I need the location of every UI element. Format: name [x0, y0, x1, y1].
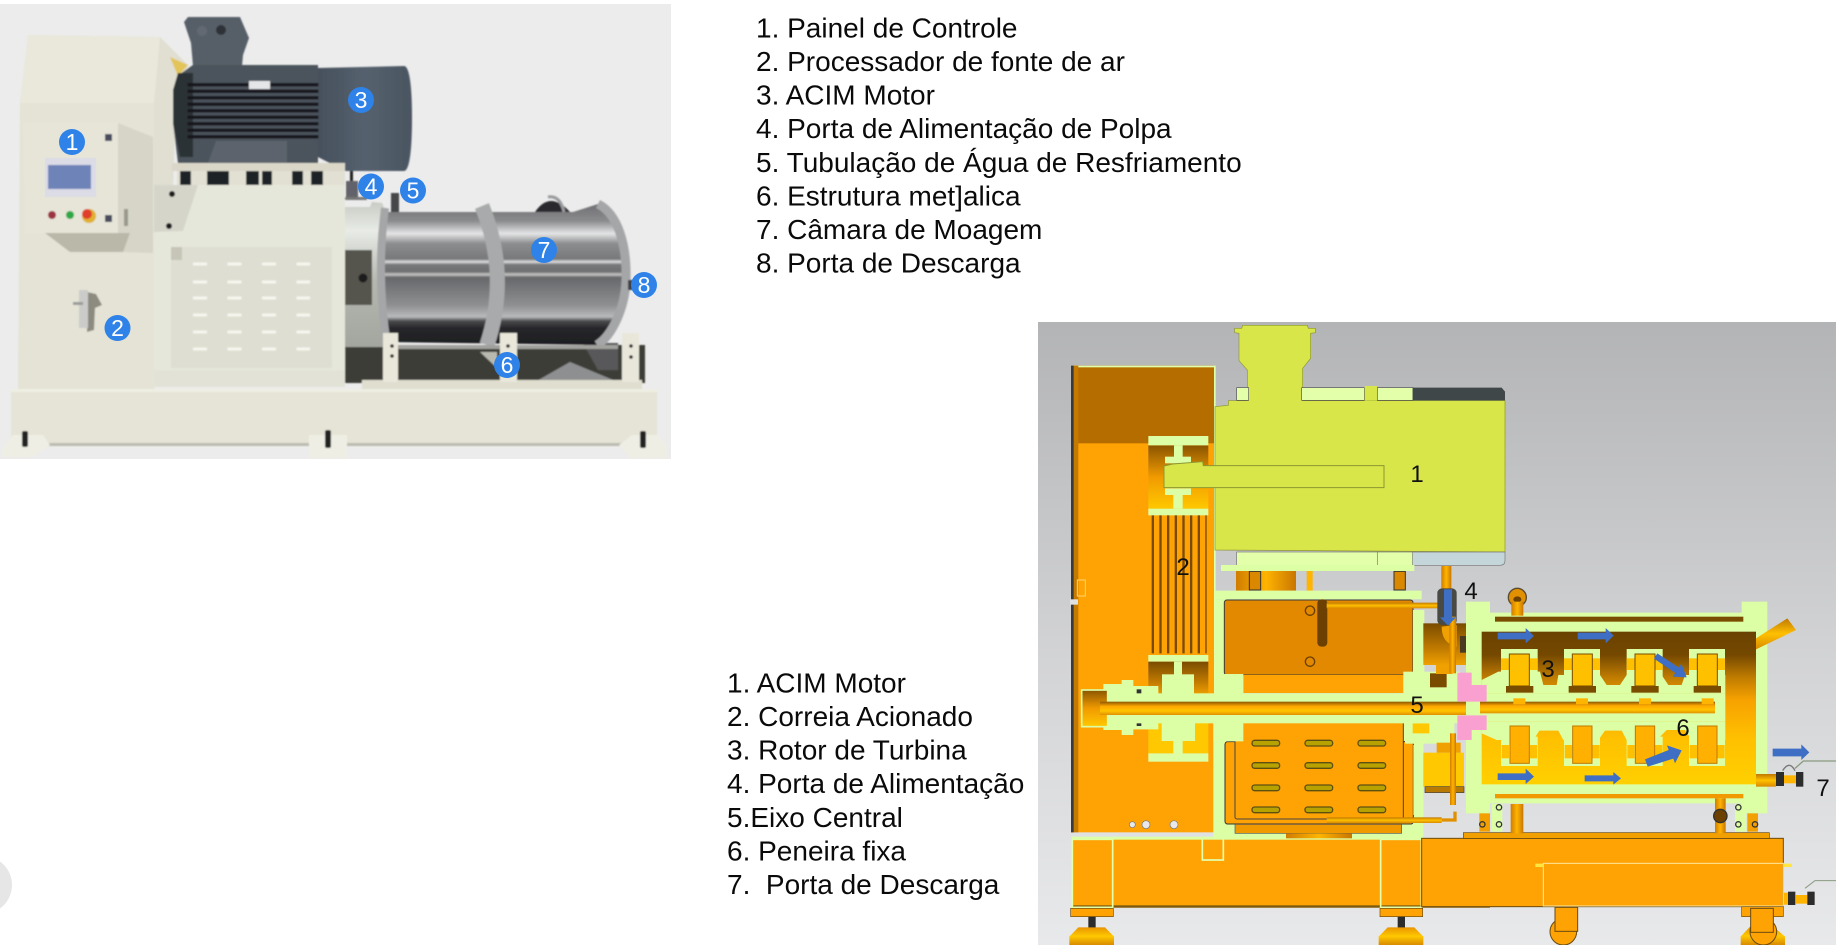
arrow: discharge flow — [1773, 744, 1809, 760]
diagram number 2: 2 — [1176, 554, 1190, 581]
motor body — [1215, 325, 1505, 552]
left half: cabinet, motor, pulleys — [1070, 325, 1505, 832]
upper rotors — [1501, 649, 1725, 693]
motor casing strips — [1221, 386, 1505, 571]
discharge vent pipe — [1756, 618, 1796, 649]
machine illustration — [2, 17, 667, 458]
diagram number 7: 7 — [1816, 775, 1830, 802]
legend: machine parts list: 8. Porta de Descarga — [756, 248, 1021, 279]
buttons — [48, 211, 56, 219]
base top ledge — [362, 380, 642, 389]
shaft core inside chamber — [1480, 702, 1715, 713]
legend: cross-section parts list: 2. Correia Acionado — [727, 701, 973, 732]
base frame — [11, 389, 657, 446]
control box — [23, 123, 153, 253]
cooling channels — [1495, 617, 1743, 622]
base frame right part — [1422, 833, 1792, 907]
support stands and bar — [383, 333, 639, 382]
shaft cap — [1082, 690, 1108, 727]
arrow: flow top 2 — [1578, 628, 1614, 643]
pink seal upper — [1457, 673, 1487, 702]
diagram number 3: 3 — [1541, 656, 1555, 683]
callout 8: 8 — [638, 272, 650, 298]
cabinet wall and panels — [1070, 366, 1216, 832]
callout 5: 5 — [407, 178, 419, 204]
callout 1: 1 — [66, 129, 78, 155]
chamber frame — [1466, 602, 1767, 813]
vent slots — [1252, 740, 1386, 813]
feet — [2, 430, 667, 458]
shaft continuation band — [1480, 693, 1725, 721]
middle frame and tank — [1215, 591, 1460, 699]
central shaft band — [1100, 693, 1490, 723]
shaft clips — [1513, 698, 1714, 704]
motor drive pulley — [1148, 436, 1208, 509]
callout 5 — [400, 178, 426, 204]
callout 6: 6 — [501, 352, 513, 378]
base frame — [1072, 837, 1490, 908]
feed inlet chamber — [1423, 566, 1473, 673]
right half: grinding chamber — [1422, 566, 1836, 945]
callout 2: 2 — [111, 315, 124, 341]
callout 4: 4 — [365, 174, 378, 200]
legend: cross-section parts list: 1. ACIM Motor — [727, 668, 906, 698]
motor frame — [173, 65, 318, 163]
diagram number 5: 5 — [1410, 692, 1424, 719]
legend: machine parts list: 2. Processador de fonte de ar — [756, 46, 1125, 77]
callout 1 — [59, 129, 85, 155]
diagram number 4: 4 — [1464, 578, 1478, 605]
cross-section diagram — [1038, 322, 1836, 945]
central shaft core — [1100, 702, 1490, 715]
legend: cross-section parts list: 4. Porta de Alimentação — [727, 768, 1024, 799]
callout 2 — [104, 315, 130, 341]
legend: cross-section parts list: 7. Porta de Descarga — [727, 869, 1000, 900]
callout 6 — [494, 352, 520, 378]
driven pulley — [1148, 662, 1208, 695]
cabinet holes — [1129, 821, 1178, 829]
photo: bead mill machine with numbered callouts — [0, 4, 671, 459]
base feet — [1069, 908, 1423, 945]
legend: machine parts list: 5. Tubulação de Água de Resfriamento — [756, 147, 1242, 178]
upper rotor band — [1482, 672, 1725, 693]
grinding chamber mount — [345, 202, 392, 347]
callout 3 — [348, 87, 374, 113]
motor with terminal box and fan cover — [172, 17, 412, 185]
diagram number 1: 1 — [1410, 461, 1424, 488]
lower left: base, lower tank, shaft — [1069, 680, 1490, 945]
legend: machine parts list: 6. Estrutura met]alica — [756, 180, 1021, 211]
drive belts — [1148, 509, 1208, 662]
lower rotor band — [1482, 721, 1725, 740]
fan cover — [318, 66, 412, 171]
arrow: flow diagonal upper — [1654, 653, 1687, 677]
legend: machine parts list: 3. ACIM Motor — [756, 80, 935, 111]
discharge port valve — [1756, 761, 1836, 787]
lower tank frame — [1213, 722, 1423, 838]
decorative grey circle at page edge — [0, 856, 12, 914]
callout 3: 3 — [355, 87, 367, 113]
legend: cross-section parts list: 6. Peneira fixa — [727, 835, 906, 866]
legend: cross-section parts list: 3. Rotor de Turbina — [727, 735, 967, 766]
chamber stands and drains — [1479, 798, 1758, 833]
callout 8 — [631, 272, 657, 298]
legend: machine parts list: 4. Porta de Alimentação de Polpa — [756, 113, 1172, 144]
casters — [1550, 907, 1785, 945]
legend: machine parts list: 1. Painel de Controle — [756, 12, 1018, 44]
lower discharge valve — [1784, 881, 1836, 905]
diagram background — [1038, 322, 1836, 945]
photo background — [0, 4, 671, 459]
callout 7: 7 — [538, 237, 550, 263]
motor shaft — [1164, 462, 1384, 488]
lower pipework — [1327, 733, 1456, 823]
pink seal lower — [1457, 715, 1487, 740]
feed port fitting — [345, 171, 367, 200]
middle cabinet — [154, 185, 345, 387]
arrow: feed flow down — [1440, 589, 1456, 626]
arrow: flow bottom 1 — [1498, 769, 1534, 784]
arrow: flow bottom 2 — [1585, 772, 1621, 785]
diagram number 6: 6 — [1676, 715, 1690, 742]
floor under chamber — [345, 345, 645, 383]
arrow: flow top 1 — [1498, 628, 1534, 643]
callout 4 — [358, 174, 384, 200]
bearing housings — [1103, 680, 1454, 744]
feed side housing — [1423, 743, 1464, 793]
arrow: flow diagonal lower — [1645, 745, 1682, 767]
motor mounting plate — [172, 163, 345, 171]
callout 7 — [531, 237, 557, 263]
air source processor — [73, 290, 102, 332]
touch screen — [45, 158, 96, 197]
motor lower components — [1236, 570, 1405, 591]
chamber interior — [1482, 632, 1756, 784]
terminal box — [184, 17, 249, 66]
legend: cross-section parts list: 5.Eixo Central — [727, 802, 903, 833]
cabinet rear panel — [18, 35, 188, 389]
legend: cross-section parts list — [727, 668, 1024, 900]
lower rotors — [1501, 726, 1725, 766]
legend: machine parts list — [756, 12, 1242, 279]
lower pulley hub — [1148, 722, 1208, 762]
grinding chamber — [381, 193, 633, 345]
legend: machine parts list: 7. Câmara de Moagem — [756, 214, 1042, 245]
top valve — [1508, 588, 1526, 616]
